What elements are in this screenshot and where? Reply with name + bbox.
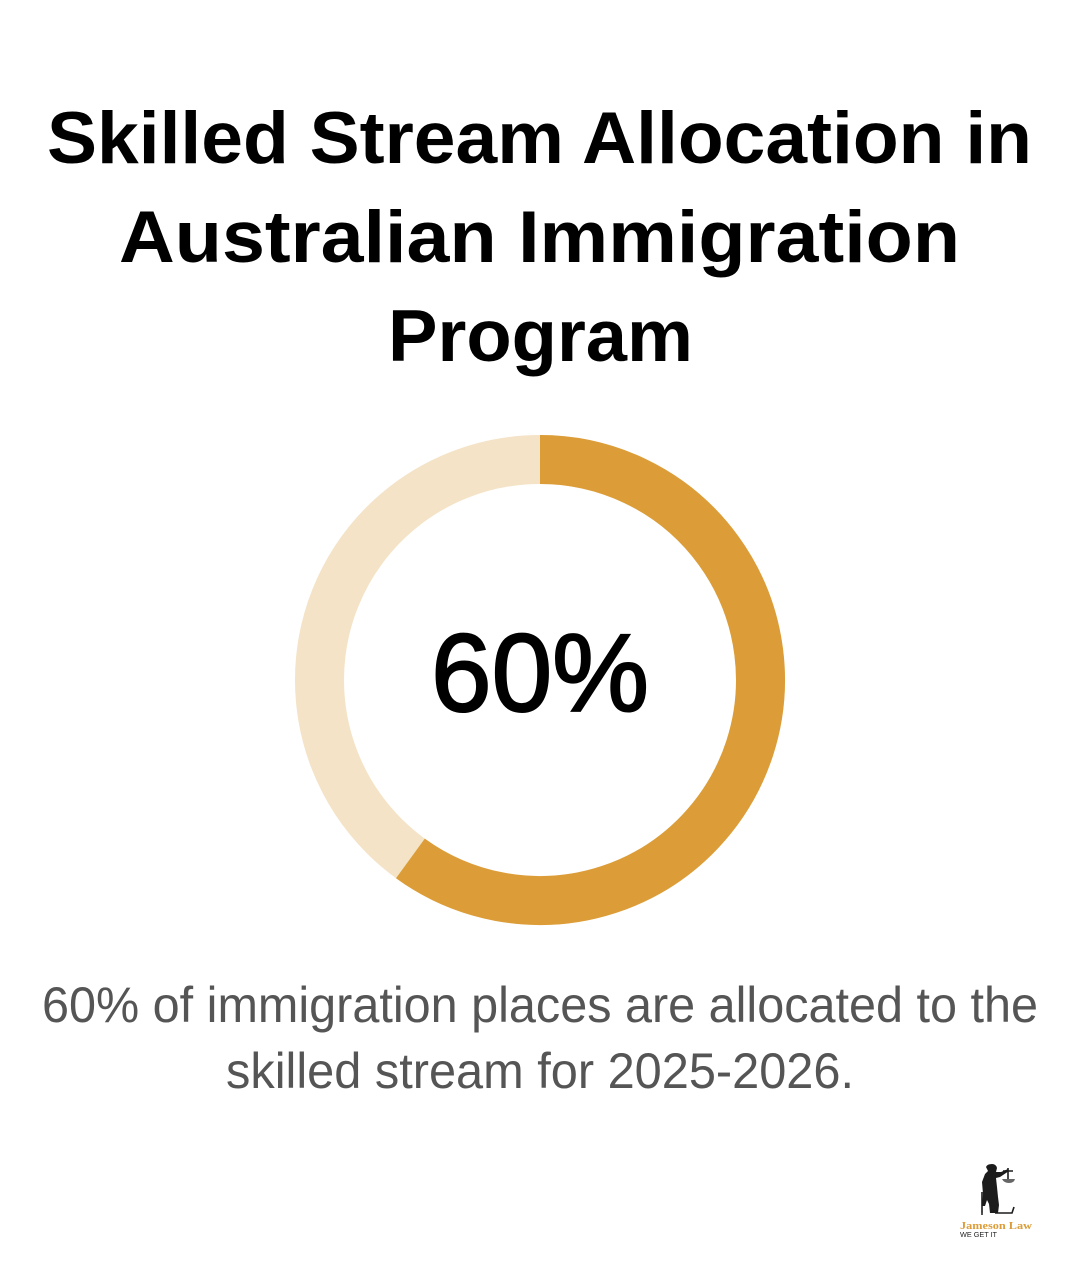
- title: Skilled Stream Allocation in: [47, 98, 1032, 179]
- icon: lady justice: [981, 1164, 1015, 1214]
- donut chart: 60 percent: [320, 460, 760, 900]
- donut value: 60%: [431, 612, 649, 735]
- logo name: Jameson Law: [960, 1220, 1032, 1232]
- title: [47, 98, 1032, 377]
- title: Australian Immigration: [119, 197, 960, 278]
- logo tagline: WE GET IT: [960, 1232, 998, 1239]
- logo: Jameson Law: [960, 1164, 1032, 1239]
- description text: [42, 977, 1038, 1099]
- title: Program: [388, 296, 693, 377]
- description text: skilled stream for 2025-2026.: [226, 1043, 854, 1099]
- description text: 60% of immigration places are allocated to the: [42, 977, 1038, 1033]
